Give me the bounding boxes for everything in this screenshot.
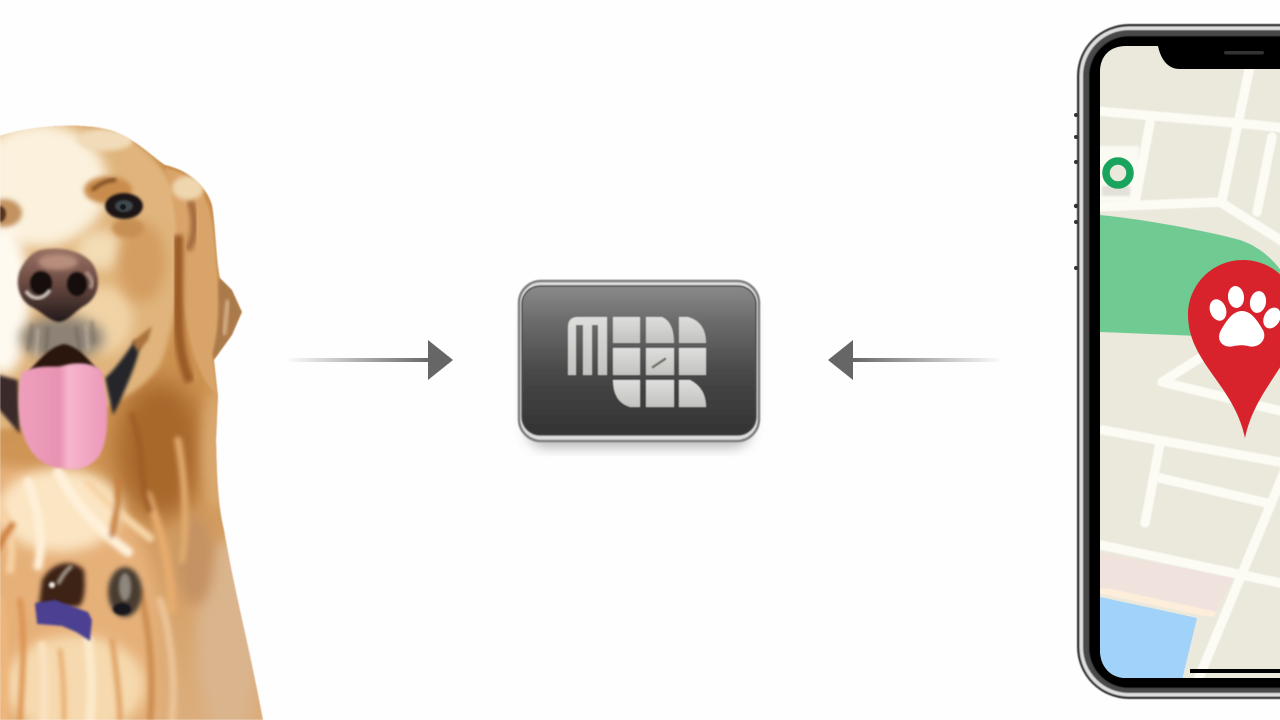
- side buttons: [1074, 113, 1078, 270]
- cream road: [1100, 590, 1215, 615]
- chip shadow: [526, 296, 752, 448]
- central tracker chip: [519, 281, 759, 448]
- road network: [1096, 66, 1280, 680]
- mouth: [0, 326, 152, 434]
- chest fur highlights: [0, 415, 185, 720]
- dog body and neck fur: [0, 120, 270, 720]
- lake: [1100, 597, 1197, 680]
- home indicator: [1190, 669, 1280, 673]
- tongue: [19, 364, 107, 469]
- chip contact grid: [613, 317, 706, 407]
- collar: [35, 563, 142, 641]
- map base: [1100, 46, 1280, 678]
- muzzle fur: [20, 316, 104, 360]
- chip logo letter block: [568, 317, 607, 375]
- grey shade under start marker: [1102, 186, 1130, 196]
- phone frame: [1077, 24, 1280, 699]
- right eye: [105, 193, 143, 219]
- pink zone: [1100, 553, 1233, 613]
- park: [1100, 215, 1280, 336]
- white block behind start marker: [1098, 146, 1139, 202]
- chip contact mark: [653, 359, 665, 367]
- left eye: [0, 199, 22, 227]
- chip body: [519, 281, 759, 441]
- right ear: [165, 168, 242, 396]
- map pin: [1188, 260, 1280, 438]
- nose: [18, 249, 98, 322]
- arrow: phone to chip: [828, 340, 1002, 380]
- phone screen map: [1096, 46, 1280, 680]
- paw icon: [1207, 285, 1280, 347]
- dog head: [0, 123, 181, 430]
- chip face: [522, 286, 756, 435]
- arrow: dog to chip: [285, 340, 453, 380]
- dog photo illustration: [0, 120, 270, 720]
- speaker: [1224, 51, 1264, 54]
- smartphone: [1074, 24, 1280, 699]
- start marker ring: [1106, 161, 1130, 185]
